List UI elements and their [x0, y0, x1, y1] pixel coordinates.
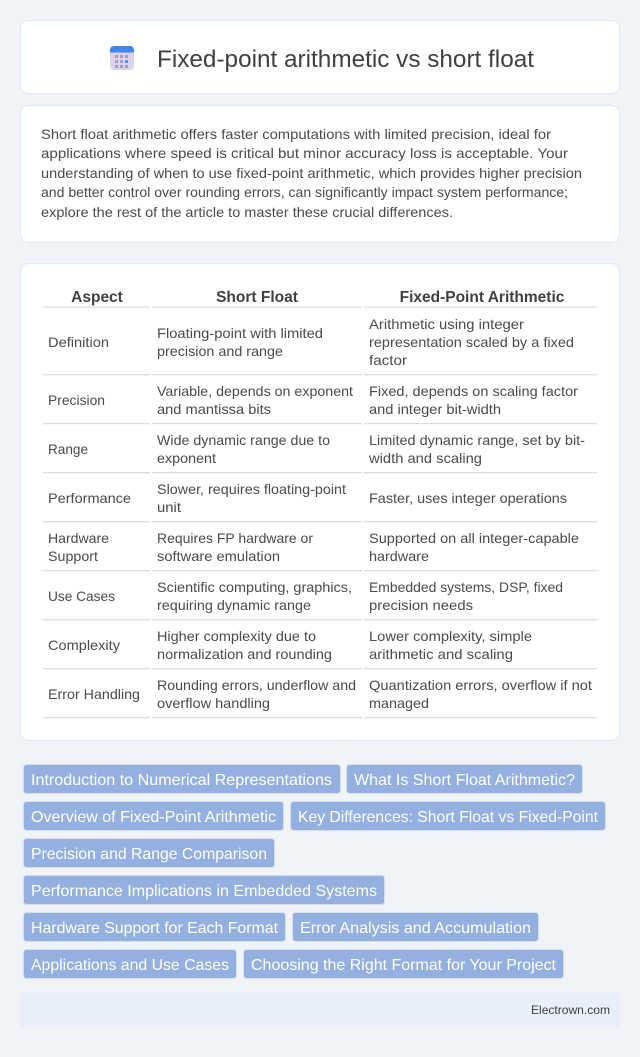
- row: performance: Slower, requires floating-point: [157, 481, 346, 497]
- row: complexity: [48, 628, 532, 662]
- row: range: width and scaling: [368, 450, 482, 466]
- row: precision: Precision: [48, 392, 105, 408]
- row: error handling: Error Handling: [48, 686, 140, 702]
- intro text: [41, 126, 582, 220]
- table header: Aspect: [71, 289, 123, 306]
- header panel: [20, 20, 620, 94]
- row: complexity: Lower complexity, simple: [369, 628, 532, 644]
- tag: [24, 764, 340, 794]
- row: range: exponent: [157, 450, 216, 466]
- tag: [24, 912, 286, 942]
- table header: Fixed-Point Arithmetic: [400, 289, 565, 306]
- row: complexity: normalization and rounding: [157, 646, 332, 662]
- tag: [346, 764, 582, 794]
- row: definition: Definition: [48, 334, 109, 350]
- table header: Short Float: [216, 289, 298, 306]
- row: hardware support: hardware: [369, 548, 429, 564]
- row: performance: Performance: [48, 490, 131, 506]
- row: hardware support: Supported on all integer-capable: [369, 530, 579, 546]
- tag: Error Analysis and Accumulation: [300, 920, 531, 937]
- tag: Applications and Use Cases: [31, 957, 229, 974]
- intro text: Short float arithmetic offers faster computations with limited precision, ideal for: [41, 126, 551, 142]
- row: error handling: managed: [369, 695, 429, 711]
- row: use cases: [48, 579, 563, 613]
- topic tags: [24, 764, 606, 978]
- row: performance: Faster, uses integer operations: [369, 490, 567, 506]
- intro text: applications where speed is critical but minor accuracy loss is acceptable. Your: [41, 145, 568, 161]
- tag: Hardware Support for Each Format: [31, 920, 279, 937]
- row: error handling: [48, 677, 592, 711]
- tag: [292, 912, 538, 942]
- row: performance: unit: [157, 499, 181, 515]
- row: definition: Arithmetic using integer: [369, 316, 524, 332]
- row: precision: Fixed, depends on scaling factor: [369, 383, 578, 399]
- row: error handling: Quantization errors, overflow if not: [369, 677, 592, 693]
- row: hardware support: Hardware: [48, 530, 109, 546]
- row: complexity: Complexity: [48, 637, 120, 653]
- row: precision: Variable, depends on exponent: [157, 383, 353, 399]
- row: hardware support: [48, 530, 579, 564]
- row: range: Range: [48, 441, 88, 457]
- comparison table panel: [20, 264, 620, 740]
- tag: [24, 876, 384, 904]
- tag: Performance Implications in Embedded Systems: [31, 883, 377, 900]
- row: error handling: Rounding errors, underflow and: [157, 677, 356, 693]
- tag: What Is Short Float Arithmetic?: [354, 772, 575, 789]
- tag: Choosing the Right Format for Your Project: [251, 957, 557, 974]
- tag: Introduction to Numerical Representations: [31, 772, 332, 789]
- tag: Overview of Fixed-Point Arithmetic: [31, 809, 276, 826]
- row: use cases: Embedded systems, DSP, fixed: [369, 579, 563, 595]
- row: complexity: arithmetic and scaling: [369, 646, 513, 662]
- row: definition: [48, 316, 574, 368]
- row: performance: [48, 481, 567, 515]
- tag: [24, 950, 236, 978]
- row: use cases: precision needs: [369, 597, 473, 613]
- row: complexity: Higher complexity due to: [157, 628, 316, 644]
- intro text: and better control over rounding errors, can significantly impact system performance;: [41, 184, 568, 200]
- tag: [24, 802, 284, 830]
- title: Fixed-point arithmetic vs short float: [157, 46, 534, 73]
- intro text: understanding of when to use fixed-point arithmetic, which provides higher precision: [41, 165, 582, 181]
- table header: [71, 289, 565, 306]
- row: definition: precision and range: [157, 343, 283, 359]
- row: range: Wide dynamic range due to: [157, 432, 330, 448]
- tag: Precision and Range Comparison: [31, 846, 267, 863]
- row: error handling: overflow handling: [157, 695, 270, 711]
- tag: [244, 950, 564, 978]
- row: hardware support: Requires FP hardware or: [157, 530, 313, 546]
- row: use cases: Use Cases: [48, 588, 115, 604]
- intro panel: [20, 106, 620, 242]
- tag: [24, 838, 274, 868]
- icon: calculator: [110, 46, 134, 70]
- row: use cases: requiring dynamic range: [157, 597, 311, 613]
- tag: [290, 802, 606, 830]
- row: hardware support: software emulation: [157, 548, 280, 564]
- row: precision: and mantissa bits: [157, 401, 271, 417]
- row: precision: [48, 383, 578, 417]
- row: use cases: Scientific computing, graphics,: [157, 579, 352, 595]
- intro text: explore the rest of the article to master these crucial differences.: [41, 204, 453, 220]
- row: precision: and integer bit-width: [369, 401, 501, 417]
- footer: [20, 993, 620, 1027]
- row: range: [48, 432, 585, 466]
- row: range: Limited dynamic range, set by bit-: [369, 432, 585, 448]
- row: definition: Floating-point with limited: [157, 325, 323, 341]
- tag: Key Differences: Short Float vs Fixed-Point: [298, 809, 599, 826]
- row: hardware support: Support: [48, 548, 98, 564]
- row: definition: factor: [369, 352, 407, 368]
- footer credit: Electrown.com: [531, 1003, 610, 1017]
- row: definition: representation scaled by a fixed: [369, 334, 574, 350]
